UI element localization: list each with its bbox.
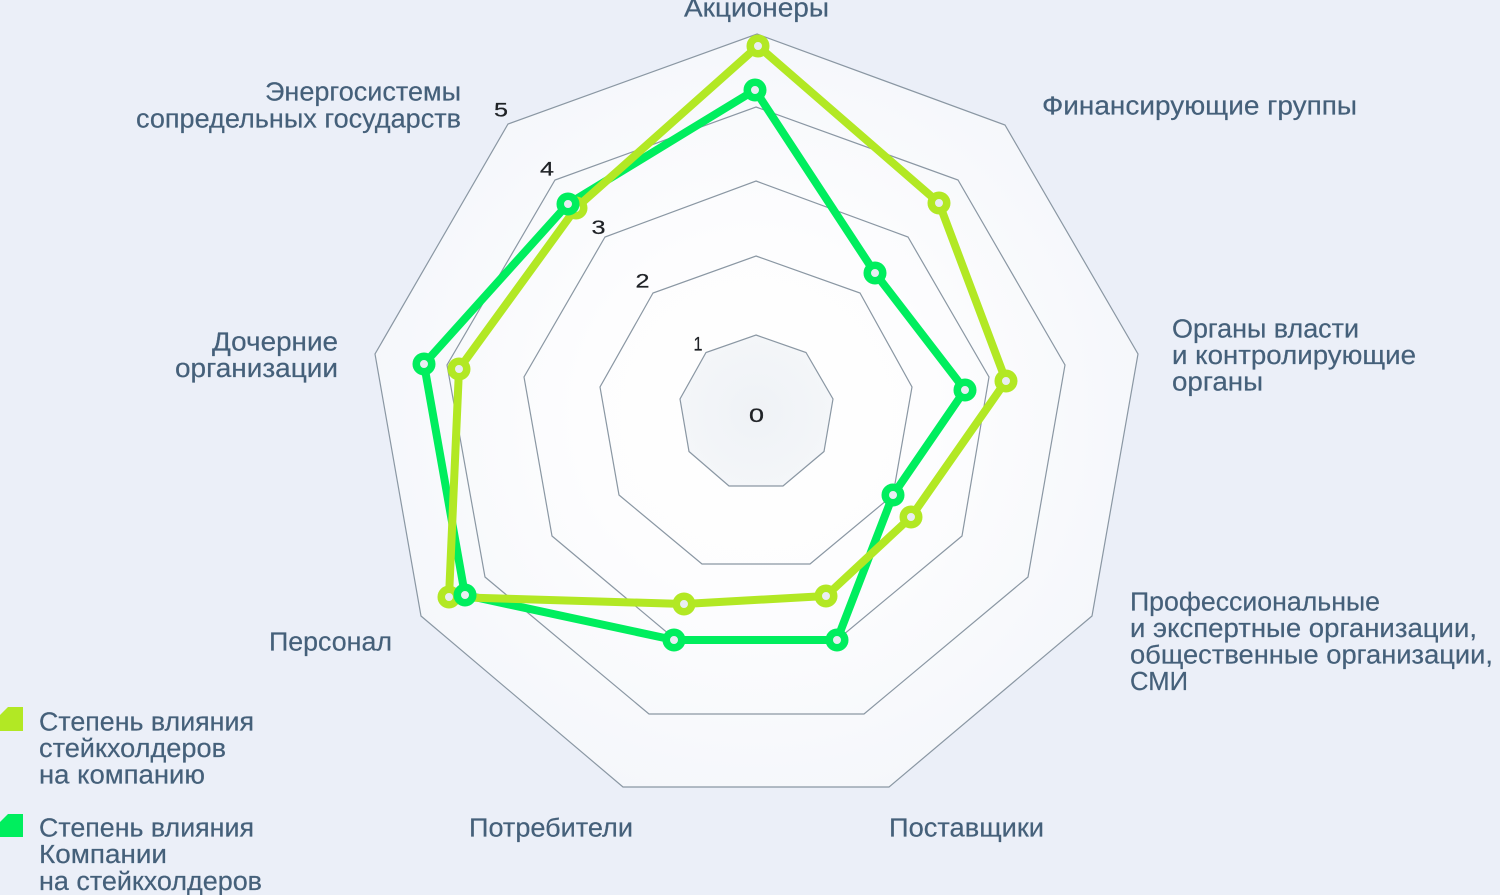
scale 5: 5 bbox=[494, 100, 508, 122]
label: authorities: органы bbox=[1172, 368, 1263, 396]
label: subsidiaries bbox=[175, 328, 338, 383]
scale numbers bbox=[494, 100, 764, 427]
scale 2: 2 bbox=[636, 272, 650, 292]
label: authorities: и контролирующие bbox=[1172, 342, 1416, 370]
radar grid bbox=[375, 34, 1138, 787]
legend swatch: stakeholders bbox=[0, 707, 23, 731]
grid level 2 bbox=[600, 256, 912, 564]
label: suppliers: Поставщики bbox=[889, 814, 1044, 842]
label: professional organisations: общественные организации, bbox=[1130, 642, 1493, 670]
legend bbox=[0, 707, 262, 895]
label: financing groups: Финансирующие группы bbox=[1042, 92, 1357, 120]
label: subsidiaries: Дочерние bbox=[212, 328, 338, 356]
legend text: company bbox=[39, 814, 262, 895]
legend text: stakeholders: Степень влияния bbox=[39, 708, 254, 736]
label: authorities: Органы власти bbox=[1172, 316, 1359, 344]
scale 4: 4 bbox=[540, 160, 555, 180]
label: neighbouring energy systems: Энергосистемы bbox=[265, 78, 461, 106]
legend swatch: company bbox=[0, 814, 23, 837]
label: professional organisations: и экспертные организации, bbox=[1130, 615, 1477, 643]
legend text: stakeholders: на компанию bbox=[39, 762, 205, 790]
markers: stakeholders bbox=[441, 38, 1014, 612]
label: personnel: Персонал bbox=[269, 628, 392, 656]
label: professional organisations: Профессиональные bbox=[1130, 588, 1380, 616]
label: professional organisations: СМИ bbox=[1130, 668, 1188, 696]
grid level 3 bbox=[524, 181, 989, 640]
series line: influence of stakeholders bbox=[449, 46, 1006, 604]
label: subsidiaries: организации bbox=[175, 355, 338, 383]
scale 3: 3 bbox=[592, 218, 606, 239]
legend text: company: Компании bbox=[39, 841, 167, 869]
markers: company bbox=[416, 82, 973, 648]
scale 0: 0 bbox=[749, 406, 764, 427]
grid level 5 bbox=[375, 34, 1138, 787]
label: professional organisations bbox=[1130, 588, 1493, 696]
legend text: stakeholders: стейкхолдеров bbox=[39, 735, 226, 763]
label: authorities bbox=[1172, 316, 1416, 396]
legend text: stakeholders bbox=[39, 708, 254, 790]
label: neighbouring energy systems bbox=[136, 78, 461, 134]
grid level 1 bbox=[680, 335, 833, 486]
scale 1: 1 bbox=[694, 334, 702, 356]
grid level 4 bbox=[447, 107, 1065, 714]
label: neighbouring energy systems: сопредельных государств bbox=[136, 106, 461, 134]
series line: influence of company bbox=[424, 90, 965, 640]
legend text: company: Степень влияния bbox=[39, 814, 254, 842]
label: consumers: Потребители bbox=[469, 814, 633, 842]
